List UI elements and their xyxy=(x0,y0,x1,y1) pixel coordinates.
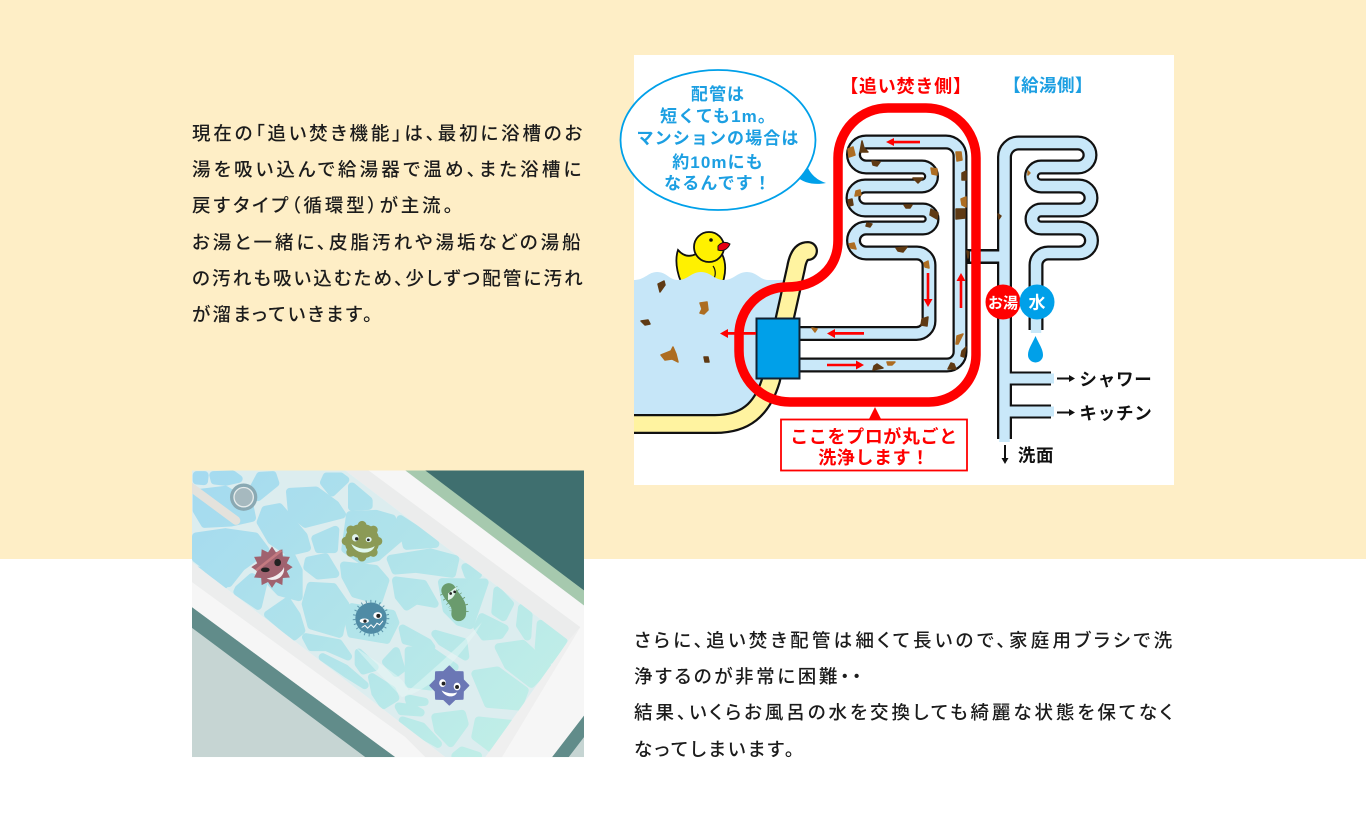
rubber duck xyxy=(676,232,730,290)
speech bubble: なるんです！ xyxy=(664,174,772,193)
red flow arrows xyxy=(720,138,966,370)
text block: recirculation explanation: 湯を吸い込んで給湯器で温め、また浴槽に xyxy=(192,156,585,182)
badge: hot water xyxy=(986,284,1020,320)
dirt inside reheating pipe xyxy=(812,141,966,370)
water xyxy=(192,470,584,757)
heading: hot water supply side: 【給湯側】 xyxy=(1003,76,1093,96)
floor xyxy=(192,470,584,757)
badge: cold water: 水 xyxy=(1028,294,1046,312)
tub lower teal edge xyxy=(192,607,584,757)
germ: green rod xyxy=(448,587,459,614)
heading: reheating side: 【追い焚き側】 xyxy=(840,76,972,96)
speech bubble: 配管は xyxy=(691,84,745,104)
text block: recirculation explanation: 戻すタイプ（循環型）が主流。 xyxy=(192,192,456,218)
badge: hot water: お湯 xyxy=(988,295,1018,312)
badge: cold water xyxy=(1020,284,1054,320)
label: washroom: 洗面 xyxy=(1018,446,1054,466)
label: kitchen: キッチン xyxy=(1079,404,1153,424)
label: washroom xyxy=(1002,445,1054,466)
tub white rim xyxy=(192,470,584,757)
text block: recirculation explanation xyxy=(192,120,585,327)
text block: recirculation explanation: が溜まっていきます。 xyxy=(192,301,375,327)
bathtub water xyxy=(634,272,790,424)
text block: cleaning difficulty: 浄するのが非常に困難・・ xyxy=(634,663,864,689)
text block: cleaning difficulty xyxy=(634,627,1176,762)
text block: cleaning difficulty: さらに、追い焚き配管は細くて長いので、家庭用ブラシで洗 xyxy=(634,627,1175,653)
water highlight xyxy=(355,622,482,697)
speech bubble xyxy=(620,70,826,210)
reheating pipe xyxy=(800,142,1000,365)
bathtub photo illustration xyxy=(189,470,584,757)
red cleaning zone outline xyxy=(739,108,976,402)
germ: olive xyxy=(345,524,379,558)
text block: recirculation explanation: 現在の「追い焚き機能」は、最初に浴槽のお xyxy=(192,120,585,146)
drain plug xyxy=(230,483,257,511)
yellow tub wall xyxy=(620,251,808,424)
callout: professional cleaning xyxy=(781,407,967,470)
text block: cleaning difficulty: なってしまいます。 xyxy=(634,736,796,762)
caustic water cells xyxy=(196,474,563,756)
tub green edge xyxy=(405,470,584,605)
icon: water drop xyxy=(1028,336,1043,363)
background band xyxy=(0,0,1366,559)
text block: cleaning difficulty: 結果、いくらお風呂の水を交換しても綺麗な状態を保てなく xyxy=(634,699,1176,725)
overflow bar xyxy=(189,485,236,520)
callout: professional cleaning: 洗浄します！ xyxy=(818,448,930,468)
text block: recirculation explanation: お湯と一緒に、皮脂汚れや湯垢などの湯船 xyxy=(192,229,584,255)
dirt in the bath water xyxy=(641,281,709,362)
diagram panel background xyxy=(634,55,1174,485)
germ: teal xyxy=(354,601,388,635)
text block: recirculation explanation: の汚れも吸い込むため、少しずつ配管に汚れ xyxy=(192,265,585,291)
back wall xyxy=(422,470,584,590)
blue water heater box xyxy=(756,318,800,378)
piping diagram xyxy=(192,55,1174,758)
callout: professional cleaning: ここをプロが丸ごと xyxy=(790,426,958,447)
germ: purple xyxy=(430,666,469,705)
speech bubble: 短くても1m。 xyxy=(660,107,776,126)
hot water supply pipe xyxy=(967,143,1092,442)
speech bubble: 約10mにも xyxy=(672,153,764,172)
speech bubble: マンションの場合は xyxy=(637,129,799,148)
germ: red xyxy=(251,546,293,588)
label: shower: シャワー xyxy=(1079,370,1153,390)
